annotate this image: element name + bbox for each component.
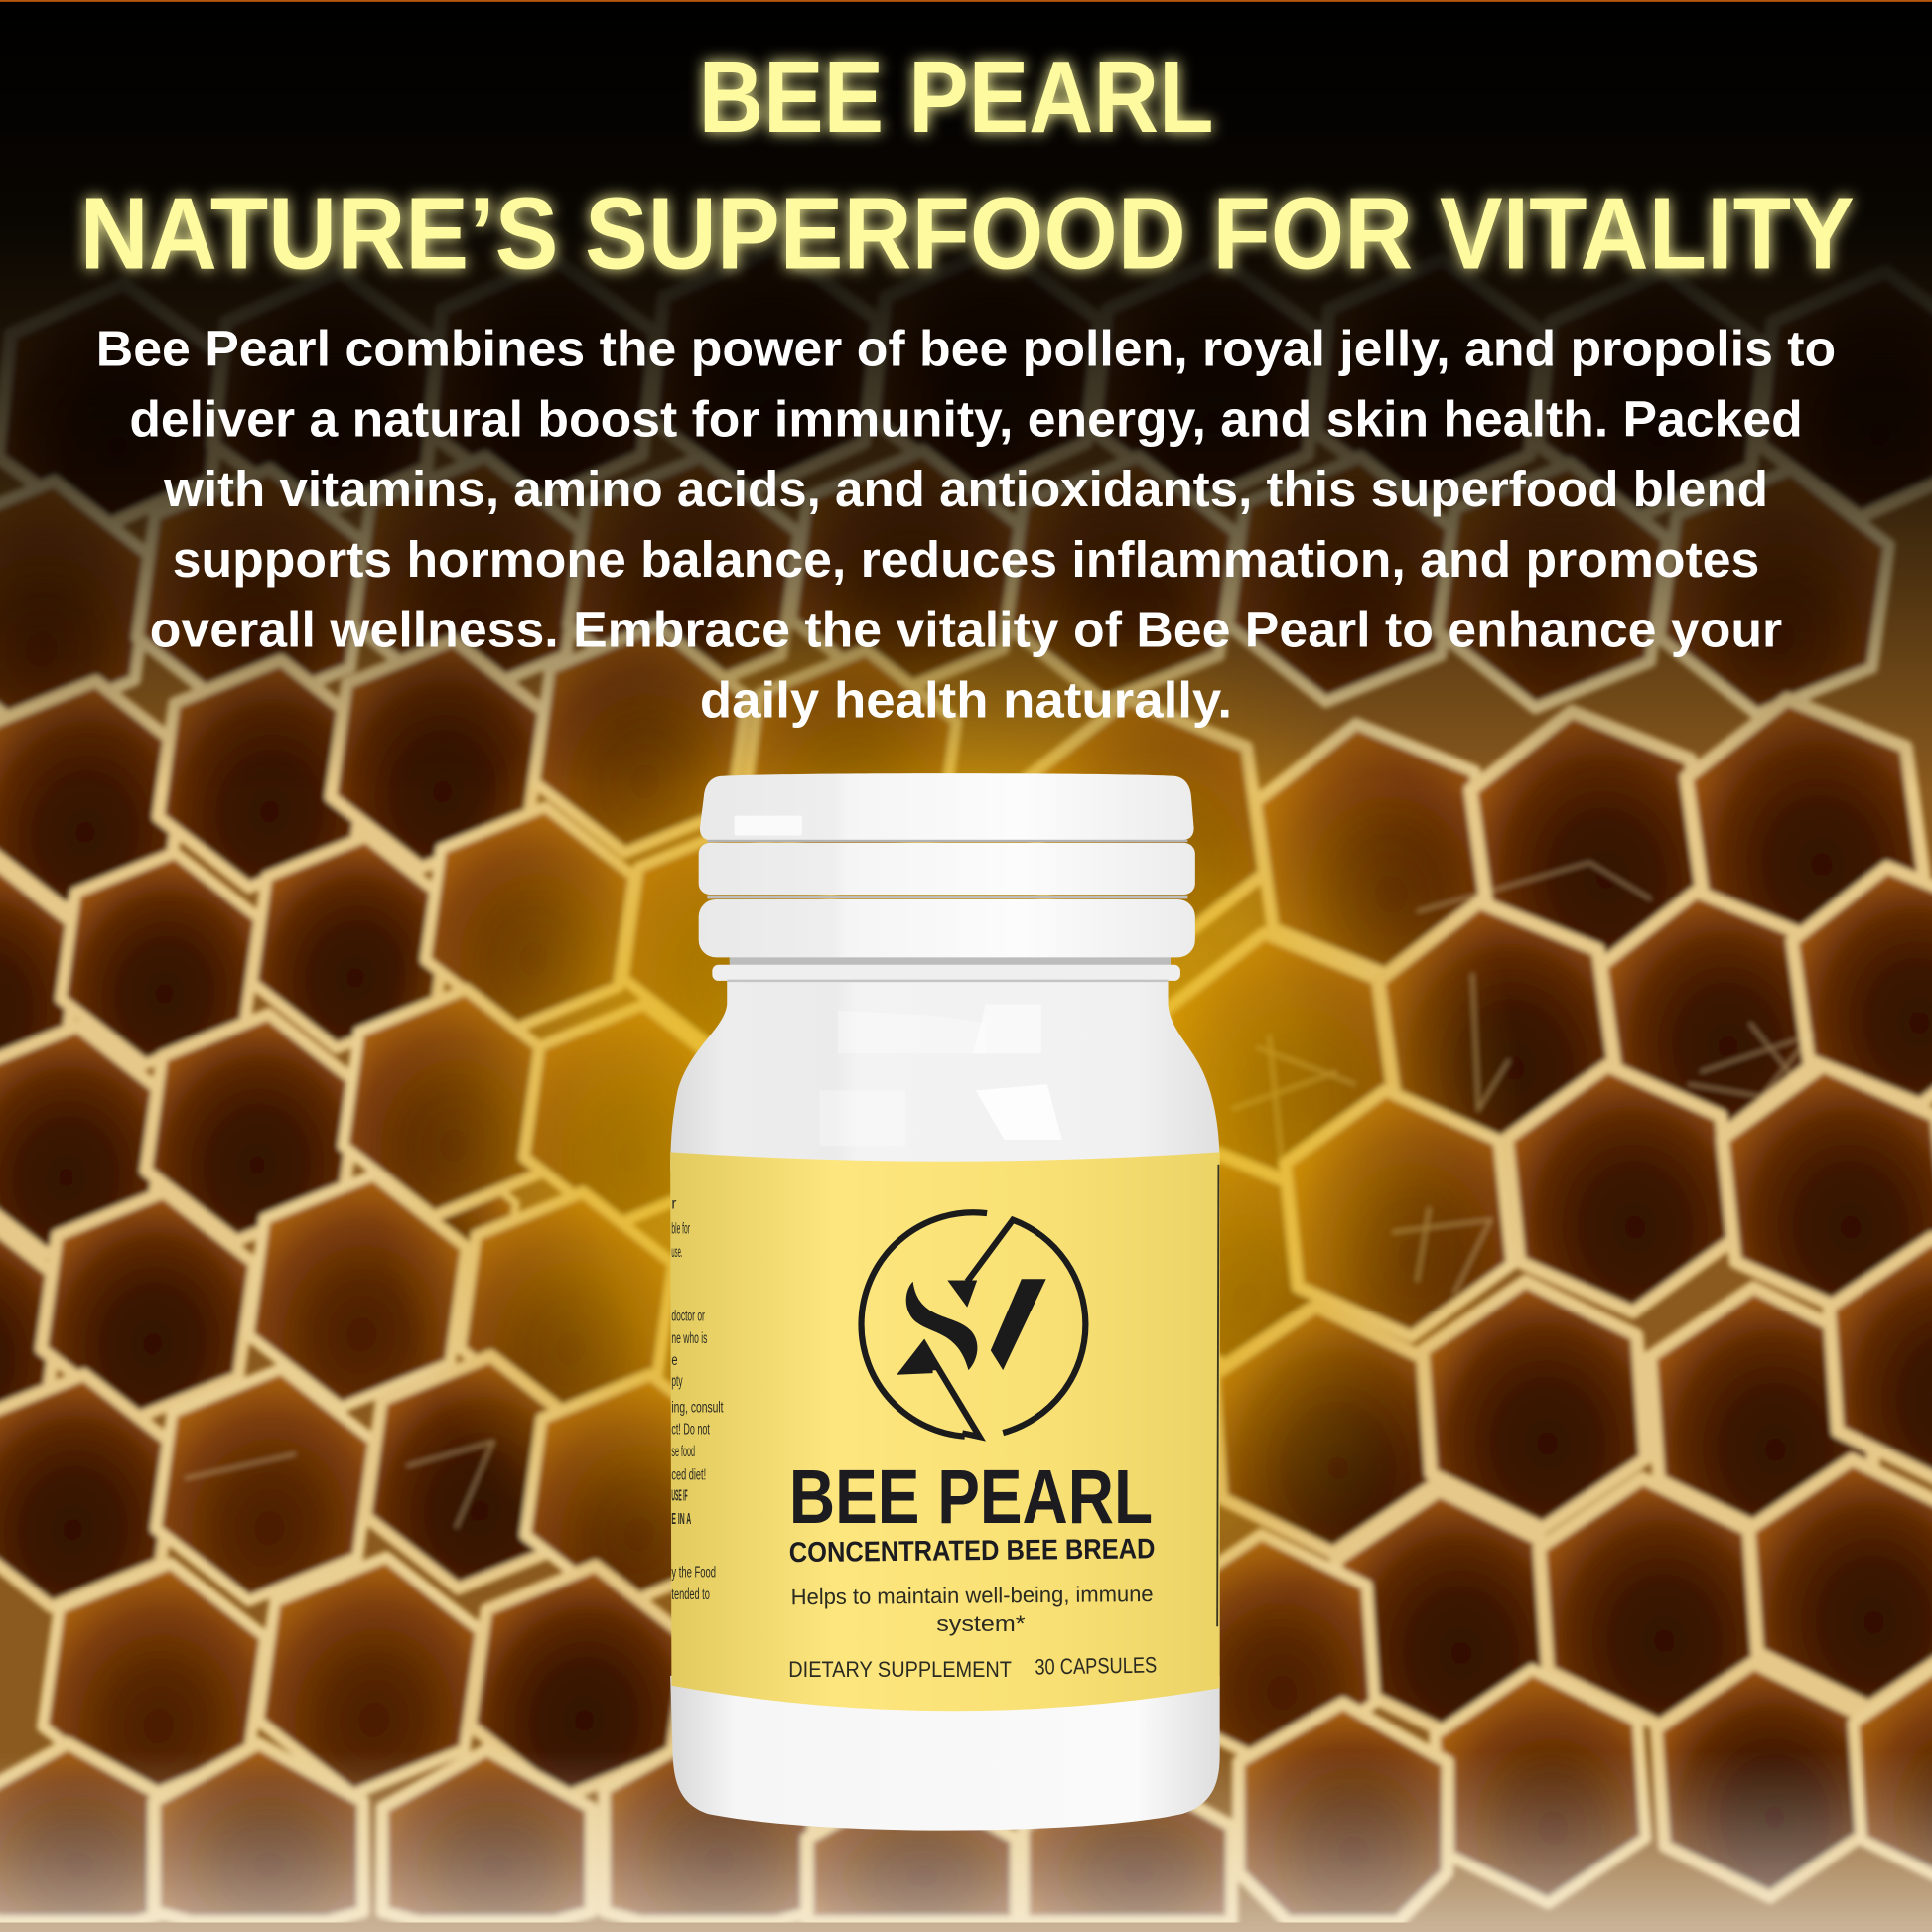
label side text: e [671, 1351, 678, 1369]
label side text [671, 1194, 724, 1603]
label side text: USE IF [671, 1487, 688, 1505]
intro paragraph: Bee Pearl combines the power of bee pollen, royal jelly, and propolis to [96, 321, 1836, 377]
product claim [791, 1582, 1154, 1636]
product bottle [670, 773, 1220, 1831]
label side text: y the Food [671, 1564, 716, 1582]
bottle shoulder [670, 973, 1220, 1171]
label side text: ne who is [671, 1329, 707, 1347]
label side text: ct! Do not [671, 1421, 710, 1439]
label side text: ble for [671, 1219, 690, 1237]
intro paragraph: daily health naturally. [700, 671, 1232, 728]
label side text: use. [671, 1243, 683, 1261]
intro paragraph: overall wellness. Embrace the vitality of Bee Pearl to enhance your [150, 602, 1782, 658]
product footer text: 30 CAPSULES [1035, 1652, 1157, 1680]
label side text: ing, consult [671, 1398, 724, 1416]
title [80, 40, 1855, 291]
intro paragraph: deliver a natural boost for immunity, energy, and skin health. Packed [129, 390, 1803, 447]
label side text: r [671, 1194, 677, 1212]
title: BEE PEARL [699, 40, 1213, 154]
label side text: se food [671, 1443, 695, 1460]
bottle highlights [819, 1004, 1062, 1146]
label side text: ced diet! [671, 1466, 706, 1484]
product footer text [788, 1652, 1157, 1682]
label side text: tended to [671, 1586, 710, 1603]
product name: BEE PEARL [789, 1454, 1153, 1540]
intro paragraph: with vitamins, amino acids, and antioxidants, this superfood blend [163, 461, 1768, 517]
yellow label [670, 1152, 1220, 1711]
product subtitle: CONCENTRATED BEE BREAD [789, 1533, 1156, 1569]
bottle cap [699, 773, 1195, 957]
product footer text: DIETARY SUPPLEMENT [788, 1657, 1012, 1682]
bottle base [670, 1676, 1220, 1831]
label side rule [1217, 1165, 1218, 1626]
brand logo [862, 1212, 1085, 1437]
intro paragraph [96, 321, 1836, 728]
intro paragraph: supports hormone balance, reduces inflammation, and promotes [173, 531, 1759, 588]
bottle neck ring [712, 951, 1180, 982]
product claim: system* [936, 1611, 1026, 1636]
product claim: Helps to maintain well-being, immune [791, 1582, 1154, 1609]
label side text: E IN A [671, 1510, 691, 1528]
honeycomb web strands [185, 863, 1811, 1528]
label side text: doctor or [671, 1307, 705, 1324]
label side text: pty [671, 1372, 683, 1390]
